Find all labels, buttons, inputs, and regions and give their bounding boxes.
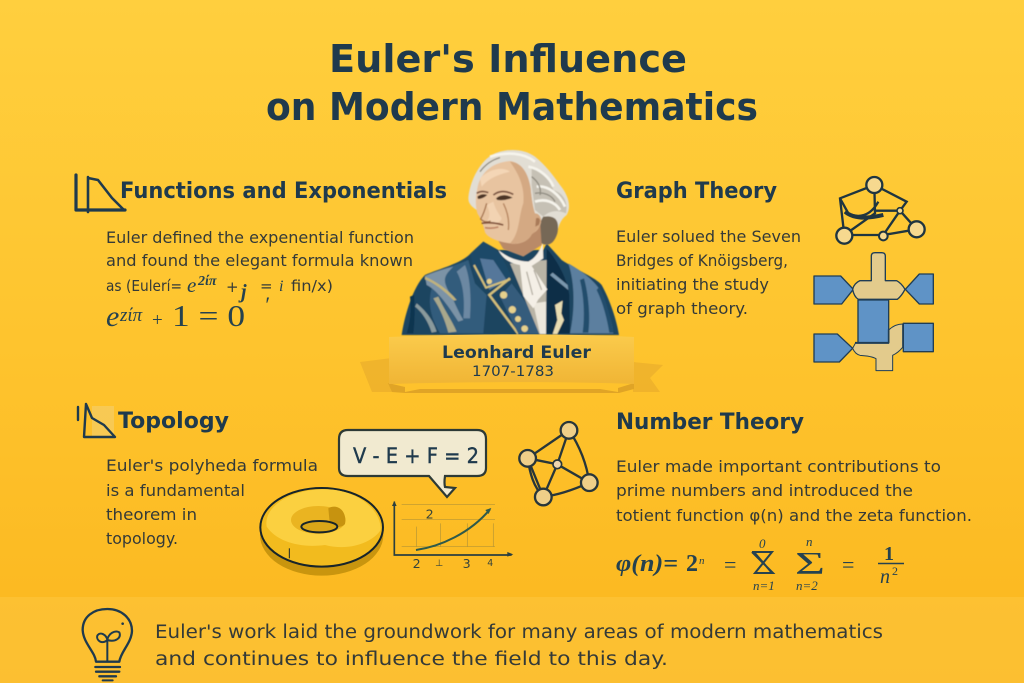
chart: growth curve: ⊥ (435, 558, 443, 569)
text block: graph theory description: of graph theory. (616, 299, 748, 318)
footer text: and continues to influence the field to this day. (155, 649, 668, 670)
text block: graph theory description: Bridges of Knöigsberg, (616, 251, 788, 270)
formula: totient and zeta: 2 (892, 564, 898, 578)
heading: topology: Topology (118, 409, 229, 434)
formula: totient and zeta: Σ (795, 545, 825, 581)
chart: growth curve: 4 (487, 558, 493, 569)
formula: totient and zeta: n=1 (753, 578, 775, 593)
text block: functions description: e (187, 273, 196, 297)
formula: totient and zeta: n (699, 555, 705, 567)
callout: Euler characteristic: V - E + F = 2 (353, 444, 479, 468)
name: Leonhard Euler (442, 343, 592, 362)
formula: totient and zeta: = (724, 552, 736, 577)
portrait shirt (510, 260, 547, 334)
formula: totient and zeta: n=2 (796, 578, 818, 593)
title: on Modern Mathematics (266, 85, 758, 129)
formula: totient and zeta (616, 534, 904, 593)
callout: Euler characteristic (339, 430, 486, 497)
portrait neck (493, 220, 542, 257)
portrait cravat (498, 240, 547, 308)
formula: euler identity: ′ (264, 292, 270, 317)
footer text (155, 622, 883, 670)
portrait face (476, 161, 541, 244)
text block: number theory description: totient function φ(n) and the zeta function. (616, 506, 972, 525)
chart: growth curve: 3 (463, 556, 471, 571)
text block: topology description: is a fundamental (106, 481, 245, 500)
ribbon body (389, 334, 634, 384)
icon: seven bridges map (814, 253, 933, 371)
text block: functions description: as (Eulerí= (106, 277, 182, 295)
formula: totient and zeta: = (842, 552, 854, 577)
title: Euler's Influence (329, 37, 687, 81)
formula: euler identity: e (106, 300, 119, 333)
ribbon tails (360, 358, 392, 392)
panel: number theory (616, 410, 972, 593)
illustration: torus (260, 488, 383, 576)
footer band (0, 597, 1024, 683)
formula: totient and zeta: 2 (686, 551, 698, 577)
text block: functions description: 2ίπ (197, 274, 217, 289)
formula: totient and zeta: 0 (759, 536, 766, 551)
text block: functions description: = (260, 277, 273, 295)
formula: euler identity: zίπ (119, 305, 143, 326)
text block: topology description (106, 456, 318, 548)
icon: triangle ruler small (78, 404, 115, 438)
heading: graph theory: Graph Theory (616, 179, 777, 204)
text block: graph theory description: initiating the study (616, 275, 769, 294)
icon: triangle ruler (76, 175, 125, 212)
portrait coat (402, 240, 619, 335)
text block: functions description: and found the elegant formula known (106, 251, 413, 270)
text block: functions description: Euler defined the expenential function (106, 228, 414, 247)
text block: functions description (106, 228, 414, 303)
panel: functions and exponentials (76, 175, 447, 333)
text block: graph theory description: Euler solued the Seven (616, 227, 801, 246)
icon: light bulb (83, 609, 132, 680)
portrait buttons (487, 279, 528, 332)
chart: growth curve: 2 (413, 556, 421, 571)
icon: network graph (836, 177, 925, 244)
panel: graph theory (616, 177, 933, 371)
dates: 1707-1783 (472, 364, 554, 380)
heading: number theory: Number Theory (616, 410, 804, 435)
text block: graph theory description (616, 227, 801, 318)
portrait back hair (468, 150, 569, 245)
text block: number theory description: Euler made important contributions to (616, 457, 941, 476)
banner: name ribbon (360, 334, 663, 393)
text block: functions description: + (226, 278, 239, 296)
portrait: Leonhard Euler (402, 150, 619, 335)
text block: topology description: topology. (106, 529, 178, 548)
heading: functions and exponentials: Functions and Exponentials (120, 179, 447, 204)
portrait head (468, 150, 569, 257)
text block: topology description: Euler's polyheda formula (106, 456, 318, 475)
text block: functions description: j (238, 281, 247, 303)
text block: number theory description (616, 457, 972, 525)
text block: number theory description: prime numbers and introduced the (616, 481, 913, 500)
formula: euler identity: + (152, 310, 163, 331)
footer text: Euler's work laid the groundwork for many areas of modern mathematics (155, 622, 883, 643)
chart: growth curve: 2 (426, 506, 434, 521)
formula: totient and zeta: n (880, 566, 890, 588)
formula: totient and zeta: n (806, 534, 812, 549)
panel: footer takeaway (83, 609, 883, 680)
text block: functions description: i (279, 278, 283, 295)
formula: totient and zeta: φ(n)= (616, 551, 678, 577)
formula: totient and zeta: 1 (884, 543, 894, 565)
title (266, 37, 758, 129)
panel: topology (78, 404, 513, 576)
text block: functions description: fin/x) (291, 277, 333, 295)
formula: euler identity: 1 = 0 (172, 298, 245, 333)
chart: growth curve (392, 501, 513, 571)
icon: network small (519, 422, 598, 505)
formula: euler identity (106, 292, 270, 333)
text block: topology description: theorem in (106, 505, 197, 524)
